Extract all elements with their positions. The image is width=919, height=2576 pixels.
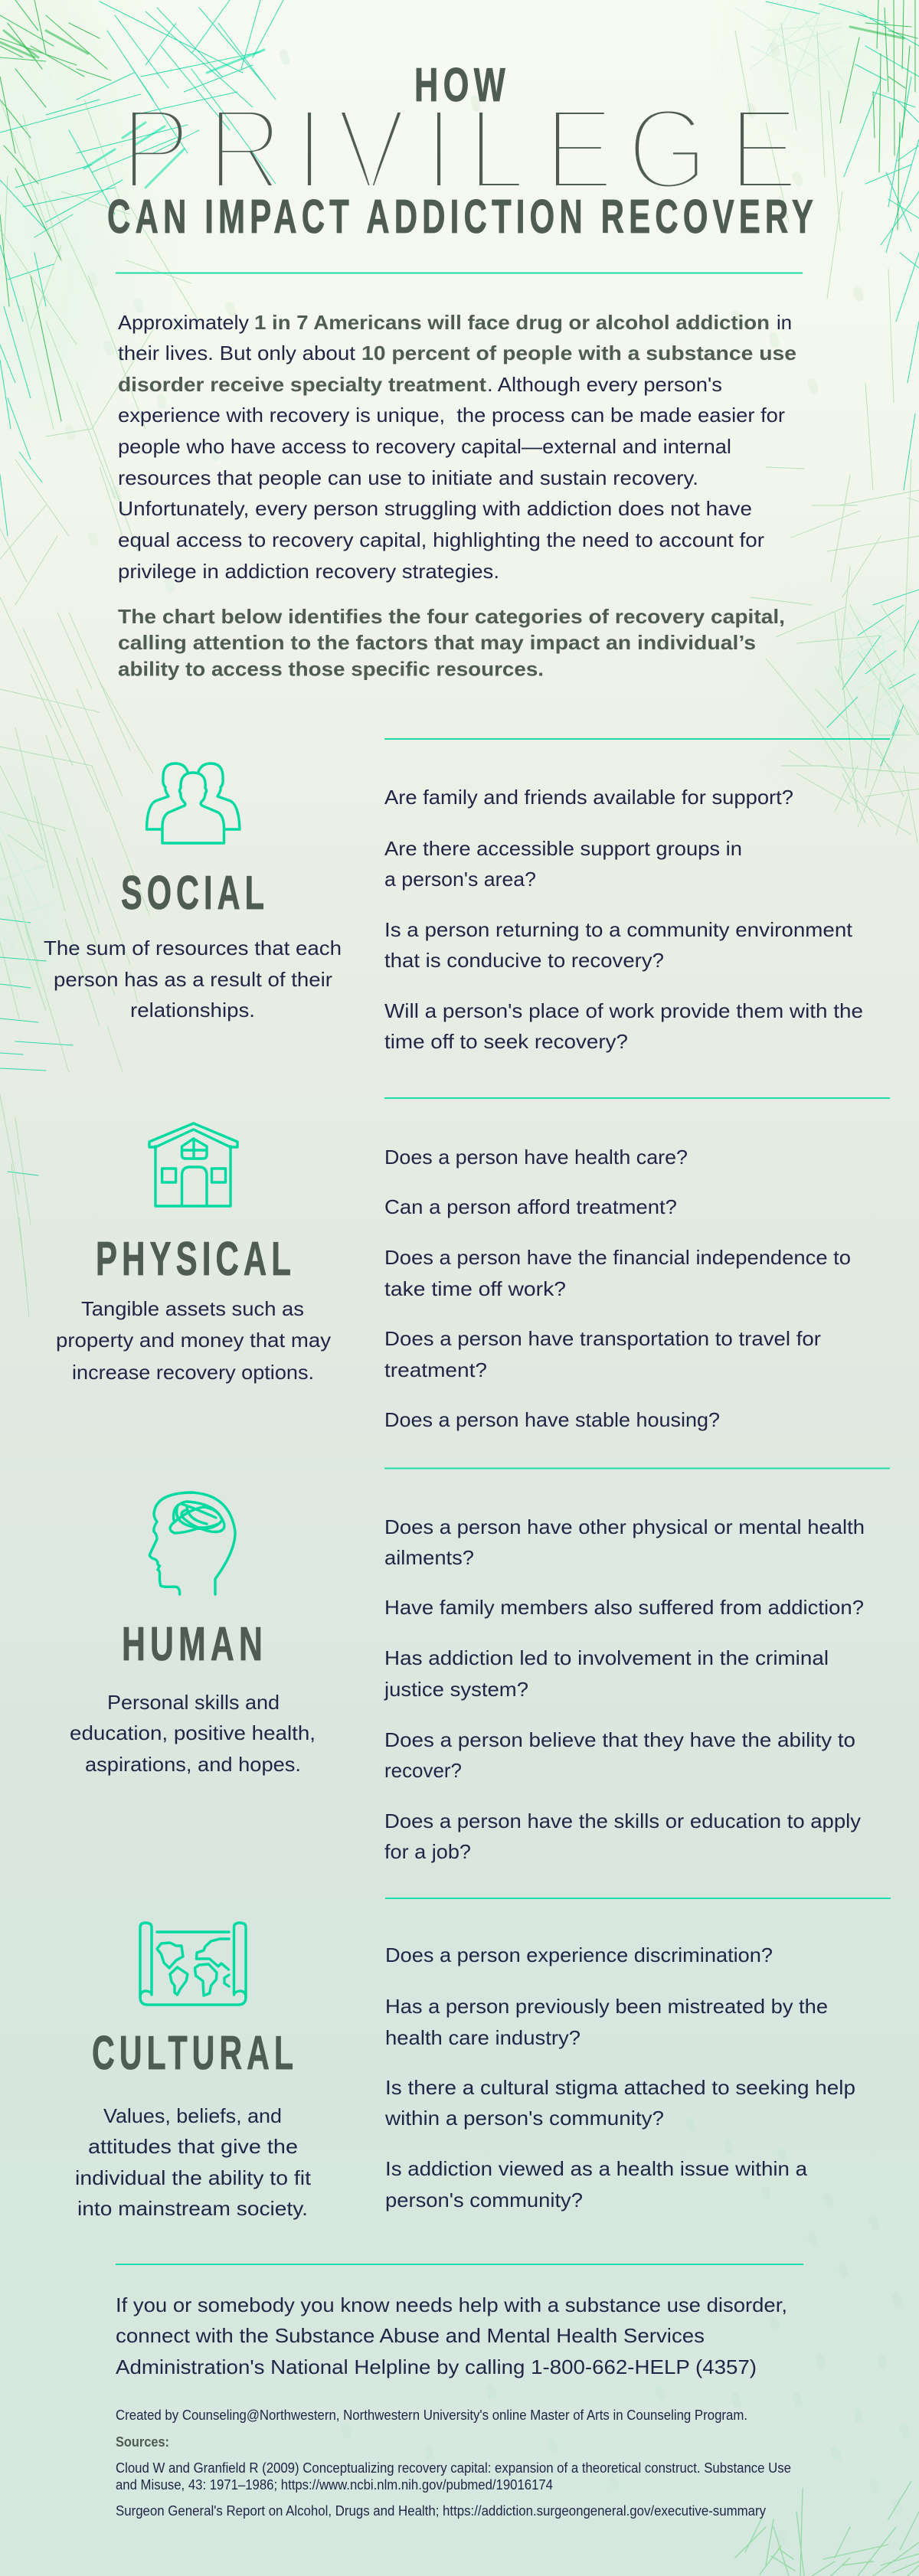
questions: human: Have family members also suffered from addiction? (384, 1596, 864, 1619)
helpline callout (116, 2293, 787, 2378)
intro paragraph: . Although every person's (487, 373, 722, 396)
description: human: aspirations, and hopes. (85, 1753, 301, 1776)
panel: human (70, 1492, 865, 1863)
questions: human: Has addiction led to involvement in the criminal (384, 1646, 829, 1669)
credits and sources: and Misuse, 43: 1971–1986; https://www.ncbi.nlm.nih.gov/pubmed/19016174 (116, 2477, 553, 2493)
chart introduction: calling attention to the factors that may impact an individual’s (118, 631, 756, 654)
description: social: relationships. (130, 999, 255, 1022)
intro paragraph: people who have access to recovery capital—external and internal (118, 435, 731, 458)
heading: human: HUMAN (122, 1618, 267, 1671)
credits and sources: Sources: (116, 2434, 169, 2450)
questions: physical: Does a person have stable housing? (384, 1408, 720, 1431)
intro paragraph: 1 in 7 Americans will face drug or alcohol addiction (254, 311, 770, 334)
credits and sources: Cloud W and Granfield R (2009) Conceptualizing recovery capital: expansion of a theoretical construct. Substance Use (116, 2460, 791, 2476)
intro paragraph: resources that people can use to initiate and sustain recovery. (118, 466, 698, 489)
questions: social: Are there accessible support groups in (384, 837, 742, 860)
questions: social: Will a person's place of work provide them with the (384, 999, 863, 1022)
description: cultural: individual the ability to fit (75, 2166, 312, 2189)
icon: head with tangled thoughts (149, 1492, 235, 1594)
panel: social (44, 763, 863, 1053)
questions: physical (384, 1146, 851, 1431)
intro paragraph: 10 percent of people with a substance use (361, 342, 796, 364)
chart introduction: ability to access those specific resources. (118, 657, 544, 680)
questions: social: Is a person returning to a community environment (384, 918, 853, 941)
questions: cultural: Does a person experience discrimination? (385, 1943, 773, 1966)
questions: social: Are family and friends available for support? (384, 786, 793, 809)
description: physical (56, 1297, 331, 1384)
description: physical: Tangible assets such as (81, 1297, 304, 1320)
questions: cultural: within a person's community? (384, 2107, 664, 2130)
intro paragraph: Unfortunately, every person struggling with addiction does not have (118, 497, 752, 520)
title (107, 59, 818, 244)
questions: human: ailments? (384, 1546, 474, 1569)
description: physical: property and money that may (56, 1329, 331, 1352)
chart introduction (118, 605, 785, 680)
description: social (44, 937, 342, 1022)
title line: HOW: HOW (414, 59, 510, 112)
questions: social (384, 786, 863, 1053)
description: cultural: attitudes that give the (88, 2135, 298, 2158)
questions: cultural: health care industry? (385, 2026, 581, 2049)
intro paragraph: equal access to recovery capital, highlighting the need to account for (118, 528, 764, 551)
description: cultural: into mainstream society. (77, 2197, 308, 2220)
credits and sources: Created by Counseling@Northwestern, Northwestern University's online Master of Arts in Counseling Program. (116, 2408, 747, 2423)
panel: cultural (75, 1923, 855, 2220)
questions: cultural: person's community? (385, 2189, 583, 2212)
chart introduction: The chart below identifies the four categories of recovery capital, (118, 605, 785, 628)
description: human (70, 1691, 316, 1776)
description: social: person has as a result of their (54, 968, 332, 991)
icon: people (147, 763, 240, 843)
questions: human: justice system? (384, 1678, 528, 1701)
intro paragraph: their lives. But only about (118, 342, 356, 364)
questions: physical: treatment? (384, 1358, 487, 1381)
heading: physical: PHYSICAL (96, 1233, 296, 1286)
questions: physical: Does a person have the financial independence to (384, 1246, 851, 1269)
intro paragraph: Approximately (118, 311, 249, 334)
questions: human (384, 1515, 865, 1863)
questions: social: time off to seek recovery? (384, 1030, 628, 1053)
description: physical: increase recovery options. (72, 1361, 314, 1384)
intro paragraph: in (777, 311, 792, 334)
questions: human: for a job? (384, 1840, 471, 1863)
questions: physical: Does a person have transportation to travel for (384, 1327, 821, 1350)
questions: cultural: Has a person previously been mistreated by the (385, 1995, 828, 2018)
questions: human: Does a person have the skills or education to apply (384, 1809, 861, 1832)
questions: physical: Can a person afford treatment? (384, 1195, 677, 1218)
credits and sources: Surgeon General's Report on Alcohol, Drugs and Health; https://addiction.surgeongeneral.gov/executive-summary (116, 2503, 766, 2519)
questions: cultural: Is there a cultural stigma attached to seeking help (385, 2076, 855, 2099)
description: cultural (75, 2104, 312, 2220)
description: human: education, positive health, (70, 1721, 316, 1744)
intro paragraph: disorder receive specialty treatment (118, 373, 486, 396)
description: social: The sum of resources that each (44, 937, 342, 959)
helpline callout: connect with the Substance Abuse and Mental Health Services (116, 2324, 705, 2347)
icon: world map scroll (140, 1923, 246, 2005)
questions: social: that is conducive to recovery? (384, 949, 664, 972)
icon: house (149, 1123, 237, 1206)
questions: cultural (384, 1943, 855, 2212)
description: human: Personal skills and (107, 1691, 280, 1714)
questions: cultural: Is addiction viewed as a health issue within a (385, 2157, 808, 2180)
panel: physical (56, 1123, 851, 1431)
intro paragraph: experience with recovery is unique, the process can be made easier for (118, 404, 785, 427)
description: cultural: Values, beliefs, and (103, 2104, 282, 2127)
questions: social: a person's area? (384, 868, 536, 891)
title line: PRIVILEGE: PRIVILEGE (121, 83, 799, 214)
credits and sources (116, 2408, 791, 2519)
intro paragraph (118, 311, 796, 583)
questions: human: recover? (384, 1759, 462, 1782)
helpline callout: Administration's National Helpline by calling 1-800-662-HELP (4357) (116, 2355, 757, 2378)
questions: human: Does a person believe that they have the ability to (384, 1728, 855, 1751)
questions: physical: take time off work? (384, 1277, 566, 1300)
intro paragraph: privilege in addiction recovery strategies. (118, 560, 499, 583)
questions: physical: Does a person have health care? (384, 1146, 688, 1169)
helpline callout: If you or somebody you know needs help with a substance use disorder, (116, 2293, 787, 2316)
heading: cultural: CULTURAL (92, 2027, 298, 2080)
questions: human: Does a person have other physical or mental health (384, 1515, 865, 1538)
heading: social: SOCIAL (121, 867, 269, 920)
